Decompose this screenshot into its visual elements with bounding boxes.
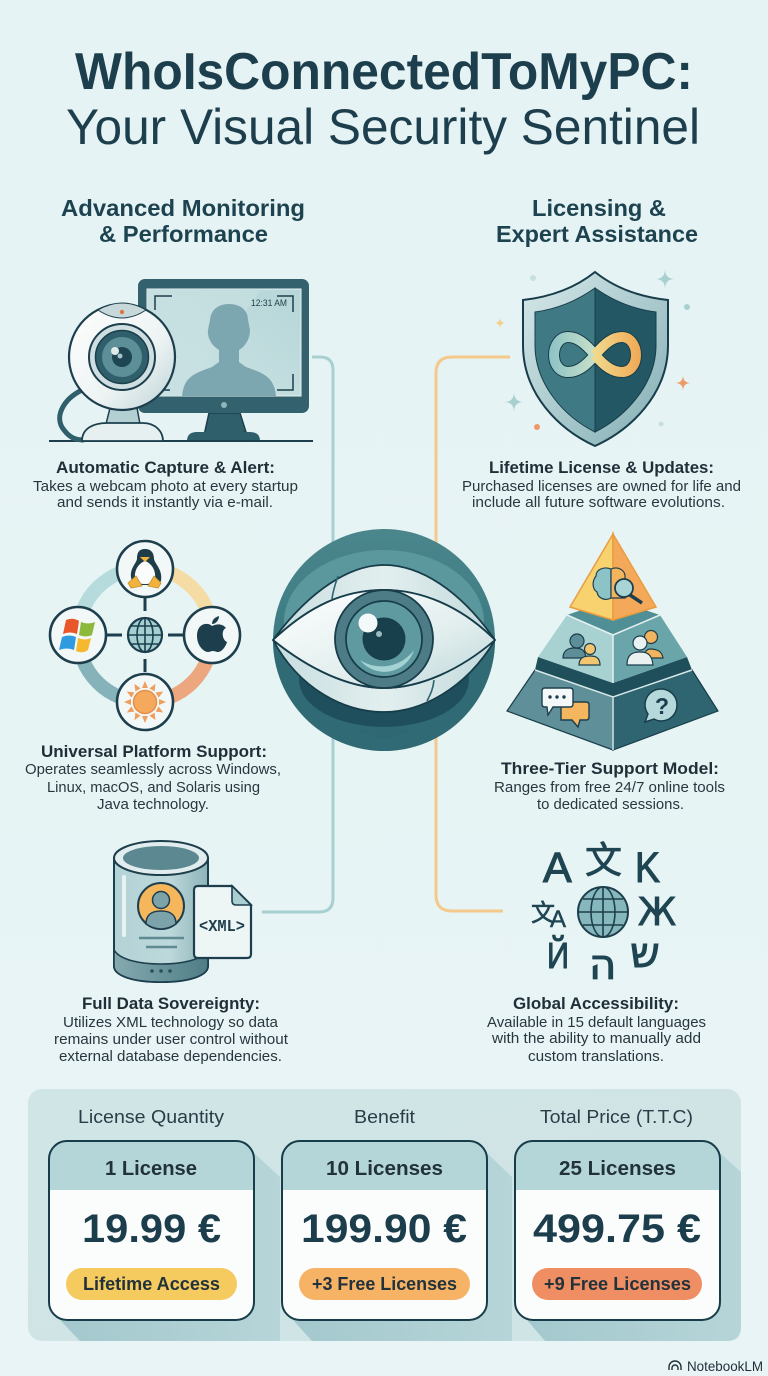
upper eyelid	[273, 565, 495, 640]
center globe	[128, 618, 162, 652]
lower eyelid	[273, 640, 495, 712]
text: full data sovereignty: Utilizes XML technology so data	[63, 1015, 279, 1031]
panel: pricing	[28, 1089, 741, 1341]
title: Your Visual Security Sentinel	[66, 99, 700, 155]
text: global accessibility: with the ability to manually add	[491, 1031, 701, 1047]
connector: right orange line	[436, 357, 510, 911]
icon: linux penguin	[117, 541, 173, 597]
top tier	[570, 534, 656, 620]
text: lifetime license and updates: include all future software evolutions.	[472, 495, 725, 511]
text: universal platform support: Linux, macOS, and Solaris using	[47, 780, 260, 796]
text: global accessibility	[487, 995, 706, 1065]
cylinder	[114, 841, 208, 982]
icon: languages around a globe: A	[543, 844, 572, 892]
title: WhoIsConnectedToMyPC:	[75, 43, 693, 101]
heading: licensing and expert assistance: Licensing &	[532, 195, 666, 221]
card: 25 licenses: 499.75 €	[533, 1207, 701, 1251]
text: full data sovereignty: remains under user control without	[54, 1032, 288, 1048]
heading: licensing and expert assistance	[496, 195, 698, 247]
question bubble	[645, 689, 677, 722]
text: universal platform support	[25, 743, 281, 813]
text: three-tier support model	[494, 760, 725, 813]
heading: advanced monitoring and performance: & Performance	[99, 221, 268, 247]
language globe	[578, 887, 628, 937]
text: automatic capture and alert	[33, 459, 298, 511]
text: three-tier support model: Ranges from free 24/7 online tools	[494, 780, 725, 796]
chat bubbles	[542, 688, 589, 727]
column headings: Benefit	[354, 1107, 415, 1127]
card: 10 licenses: 199.90 €	[301, 1207, 467, 1251]
connector: left teal line	[262, 357, 333, 912]
icon: three-tier pyramid	[507, 534, 718, 750]
card: 25 licenses: 25 Licenses	[559, 1158, 676, 1180]
icon: languages around a globe: Ж	[638, 890, 676, 934]
text: three-tier support model: to dedicated sessions.	[537, 797, 684, 813]
icon: languages around a globe: K	[635, 844, 660, 892]
column headings	[78, 1107, 693, 1127]
card shadows	[60, 1153, 741, 1341]
title	[66, 43, 700, 155]
xml file	[194, 886, 251, 958]
text: global accessibility: Available in 15 default languages	[487, 1015, 706, 1031]
brain	[593, 568, 611, 599]
text: universal platform support: Java technology.	[97, 797, 209, 813]
icon: languages around a globe: ה	[589, 940, 616, 989]
icon: shield with infinity	[494, 269, 691, 446]
icon: apple logo	[184, 607, 240, 663]
text: universal platform support: Universal Platform Support:	[41, 743, 267, 761]
bottom tier	[507, 657, 718, 750]
icon: languages around a globe: A	[550, 906, 566, 933]
card: 1 license	[49, 1141, 254, 1320]
card: 25 licenses	[515, 1141, 720, 1320]
text: three-tier support model: Three-Tier Support Model:	[501, 760, 719, 778]
text: automatic capture and alert: Takes a webcam photo at every startup	[33, 479, 298, 495]
text: full data sovereignty	[54, 995, 288, 1065]
people icons	[563, 630, 663, 665]
card: 1 license: 1 License	[105, 1158, 197, 1180]
card: 10 licenses	[282, 1141, 487, 1320]
icon: webcam and monitor	[49, 279, 313, 442]
sclera	[273, 590, 495, 688]
text: global accessibility: custom translations.	[528, 1049, 664, 1065]
card: 1 license: Lifetime Access	[83, 1274, 220, 1294]
text: automatic capture and alert: and sends it instantly via e-mail.	[57, 495, 273, 511]
notebooklm watermark: NotebookLM	[687, 1358, 763, 1374]
text: full data sovereignty: external database dependencies.	[59, 1049, 282, 1065]
text: universal platform support: Operates seamlessly across Windows,	[25, 762, 281, 778]
heading: licensing and expert assistance: Expert Assistance	[496, 221, 698, 247]
text: automatic capture and alert: Automatic Capture & Alert:	[56, 459, 275, 477]
icon: central eye	[273, 529, 495, 751]
heading: advanced monitoring and performance: Advanced Monitoring	[61, 195, 305, 221]
card: 25 licenses: +9 Free Licenses	[544, 1274, 691, 1294]
middle tier	[538, 607, 687, 683]
card: 10 licenses: +3 Free Licenses	[312, 1274, 457, 1294]
icon: languages around a globe: 文	[531, 893, 555, 928]
icon: languages around a globe: Й	[547, 934, 569, 976]
avatar	[138, 883, 184, 929]
xml file: <XML>	[199, 918, 245, 937]
icon: database with XML file	[114, 841, 251, 982]
text: lifetime license and updates	[462, 459, 741, 511]
icon: platform ring	[50, 541, 240, 730]
webcam	[60, 303, 175, 441]
magnifier	[630, 595, 642, 603]
monitor	[138, 279, 309, 441]
text: lifetime license and updates: Lifetime License & Updates:	[489, 459, 714, 477]
question bubble: ?	[655, 693, 669, 719]
card: 1 license: 19.99 €	[82, 1207, 221, 1251]
text: lifetime license and updates: Purchased licenses are owned for life and	[462, 479, 741, 495]
infinity symbol	[554, 337, 636, 372]
heading: advanced monitoring and performance	[61, 195, 305, 247]
icon: languages around a globe: ש	[630, 928, 660, 977]
iris	[335, 590, 433, 688]
column headings: Total Price (T.T.C)	[540, 1107, 693, 1127]
icon: languages around a globe: 文	[585, 830, 622, 884]
icon: languages around a globe	[531, 830, 676, 989]
ring segments	[78, 568, 212, 702]
sparkles	[494, 269, 691, 430]
column headings: License Quantity	[78, 1107, 224, 1127]
icon: windows logo	[50, 607, 106, 663]
ground line	[49, 440, 313, 442]
icon: solaris sun	[117, 674, 173, 730]
monitor: 12:31 AM	[251, 298, 287, 308]
card: 10 licenses: 10 Licenses	[326, 1158, 443, 1180]
text: full data sovereignty: Full Data Sovereignty:	[82, 995, 260, 1013]
text: global accessibility: Global Accessibility:	[513, 995, 679, 1013]
